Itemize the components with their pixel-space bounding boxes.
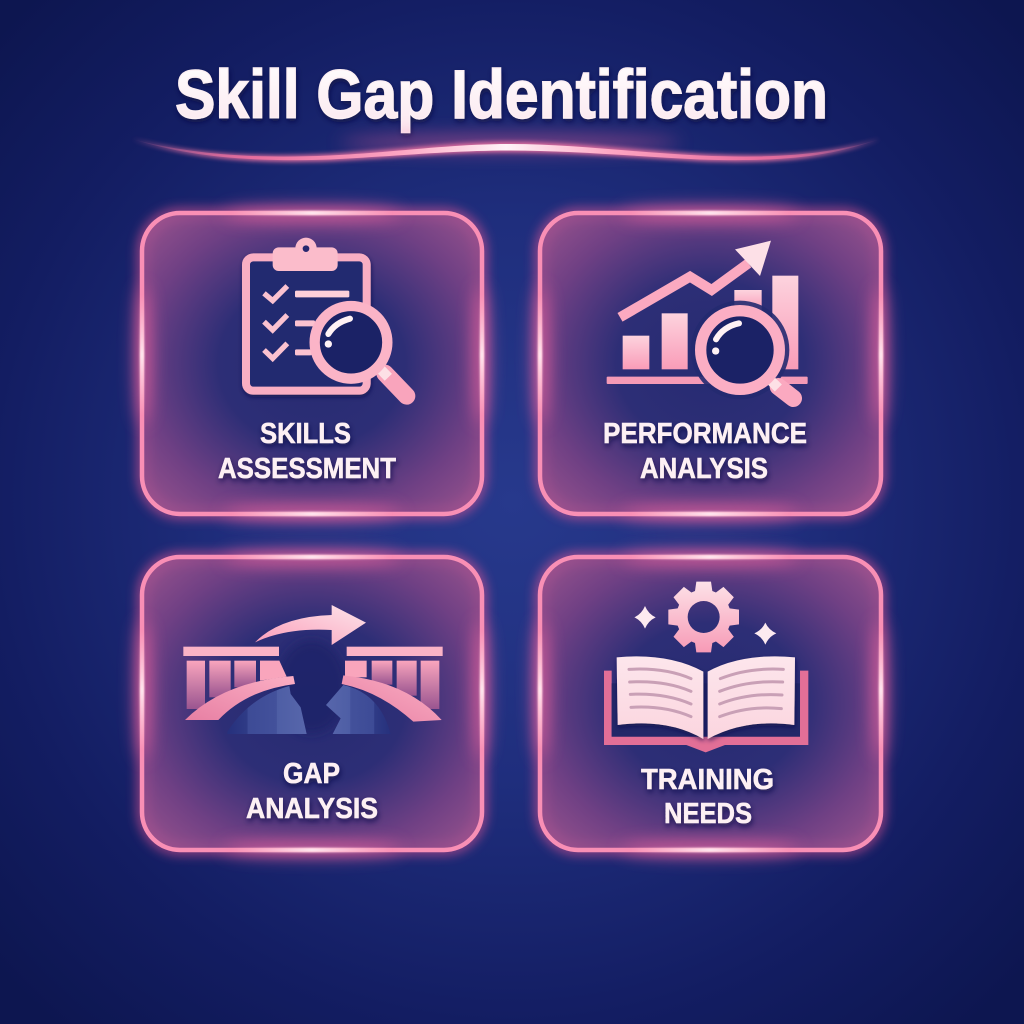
label: skills assessment	[218, 418, 396, 485]
label: skills assessment: ASSESSMENT	[218, 453, 396, 485]
arrow over gap	[255, 605, 366, 645]
icon: bar chart with magnifier	[607, 241, 808, 399]
icon: clipboard with magnifier	[246, 238, 407, 396]
label: skills assessment: SKILLS	[260, 418, 351, 450]
panel: performance analysis	[534, 207, 887, 520]
gear	[668, 582, 739, 652]
label: gap analysis: GAP	[283, 758, 340, 790]
gap shadow	[277, 640, 347, 733]
panel: skills assessment	[136, 207, 488, 520]
icon: gear, sparkles and open book	[604, 582, 808, 752]
title underline glow	[132, 135, 880, 162]
icon: broken bridge with arrow	[183, 605, 443, 734]
label: performance analysis	[603, 418, 807, 485]
card frame	[534, 551, 887, 856]
label: training needs: TRAINING	[641, 764, 774, 796]
label: performance analysis: ANALYSIS	[640, 453, 768, 485]
sparkles	[634, 606, 776, 645]
book text lines	[629, 669, 783, 717]
card frame	[136, 207, 488, 520]
label: performance analysis: PERFORMANCE	[603, 418, 807, 450]
book pages	[617, 656, 795, 739]
book cover	[604, 671, 808, 752]
panel: gap analysis	[136, 551, 488, 856]
card frame	[136, 551, 488, 856]
title: Skill Gap Identification	[175, 56, 828, 133]
panel: training needs	[534, 551, 887, 856]
left bridge section	[183, 647, 307, 734]
right bridge section	[326, 647, 443, 734]
label: gap analysis	[246, 758, 378, 825]
label: training needs: NEEDS	[664, 798, 752, 830]
label: training needs	[641, 764, 774, 830]
card frame	[534, 207, 887, 520]
label: gap analysis: ANALYSIS	[246, 793, 378, 825]
